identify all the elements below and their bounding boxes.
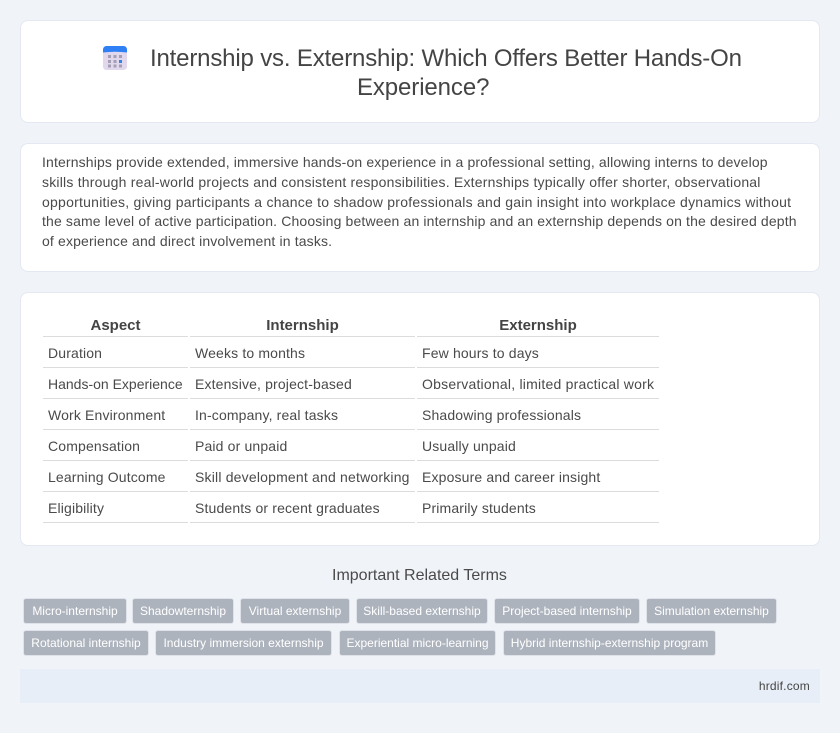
header: Internship: Internship (266, 317, 339, 334)
comparison table: Shadowing professionals (422, 407, 581, 423)
panel: comparison table (20, 292, 820, 546)
comparison table: Learning Outcome (48, 469, 166, 485)
related term tags: Micro-internship (32, 604, 118, 618)
description text (42, 154, 797, 249)
comparison table: Extensive, project-based (195, 376, 352, 392)
comparison table: Students or recent graduates (195, 500, 380, 516)
related term tags: Virtual externship (249, 604, 341, 618)
related term tags: Project-based internship (502, 604, 632, 618)
comparison table: Paid or unpaid (195, 438, 287, 454)
description text: the same level of active participation. Choosing between an internship and an externship depends on the desired depth (42, 213, 797, 229)
panel: description (20, 143, 820, 272)
description text: opportunities, giving participants a chance to shadow professionals and gain insight into workplace dynamics without (42, 194, 791, 210)
title: Experience? (357, 74, 489, 101)
comparison table (43, 317, 659, 523)
related term tags: Skill-based externship (363, 604, 481, 618)
comparison table: Compensation (48, 438, 140, 454)
comparison table: Hands-on Experience (48, 376, 183, 392)
comparison table: Work Environment (48, 407, 165, 423)
comparison table: Exposure and career insight (422, 469, 600, 485)
comparison table: Weeks to months (195, 345, 305, 361)
related term tags: Experiential micro-learning (346, 636, 489, 650)
comparison table: Duration (48, 345, 102, 361)
related term tags (23, 598, 777, 656)
related term tags: Shadowternship (140, 604, 226, 618)
description text: skills through real-world projects and consistent responsibilities. Externships typically offer shorter, observational (42, 174, 761, 190)
footer source: hrdif.com (759, 679, 810, 693)
description text: of experience and direct involvement in tasks. (42, 233, 332, 249)
header: Externship: Externship (499, 317, 577, 334)
related term tags: Industry immersion externship (163, 636, 324, 650)
header card (20, 20, 820, 123)
heading: related terms: Important Related Terms (332, 567, 507, 584)
comparison table: Primarily students (422, 500, 536, 516)
title: Internship vs. Externship: Which Offers Better Hands-On (150, 45, 742, 72)
description text: Internships provide extended, immersive hands-on experience in a professional setting, allowing interns to develop (42, 154, 768, 170)
comparison table: In-company, real tasks (195, 407, 338, 423)
comparison table: Few hours to days (422, 345, 539, 361)
related term tags: Hybrid internship-externship program (511, 636, 708, 650)
footer bar (20, 669, 820, 703)
related term tags: Simulation externship (654, 604, 769, 618)
comparison table: Skill development and networking (195, 469, 410, 485)
comparison table: Observational, limited practical work (422, 376, 654, 392)
icon: calendar (103, 46, 127, 70)
header: Aspect: Aspect (90, 317, 141, 334)
related term tags: Rotational internship (31, 636, 141, 650)
comparison table: Usually unpaid (422, 438, 516, 454)
comparison table: Eligibility (48, 500, 104, 516)
title (150, 45, 742, 101)
